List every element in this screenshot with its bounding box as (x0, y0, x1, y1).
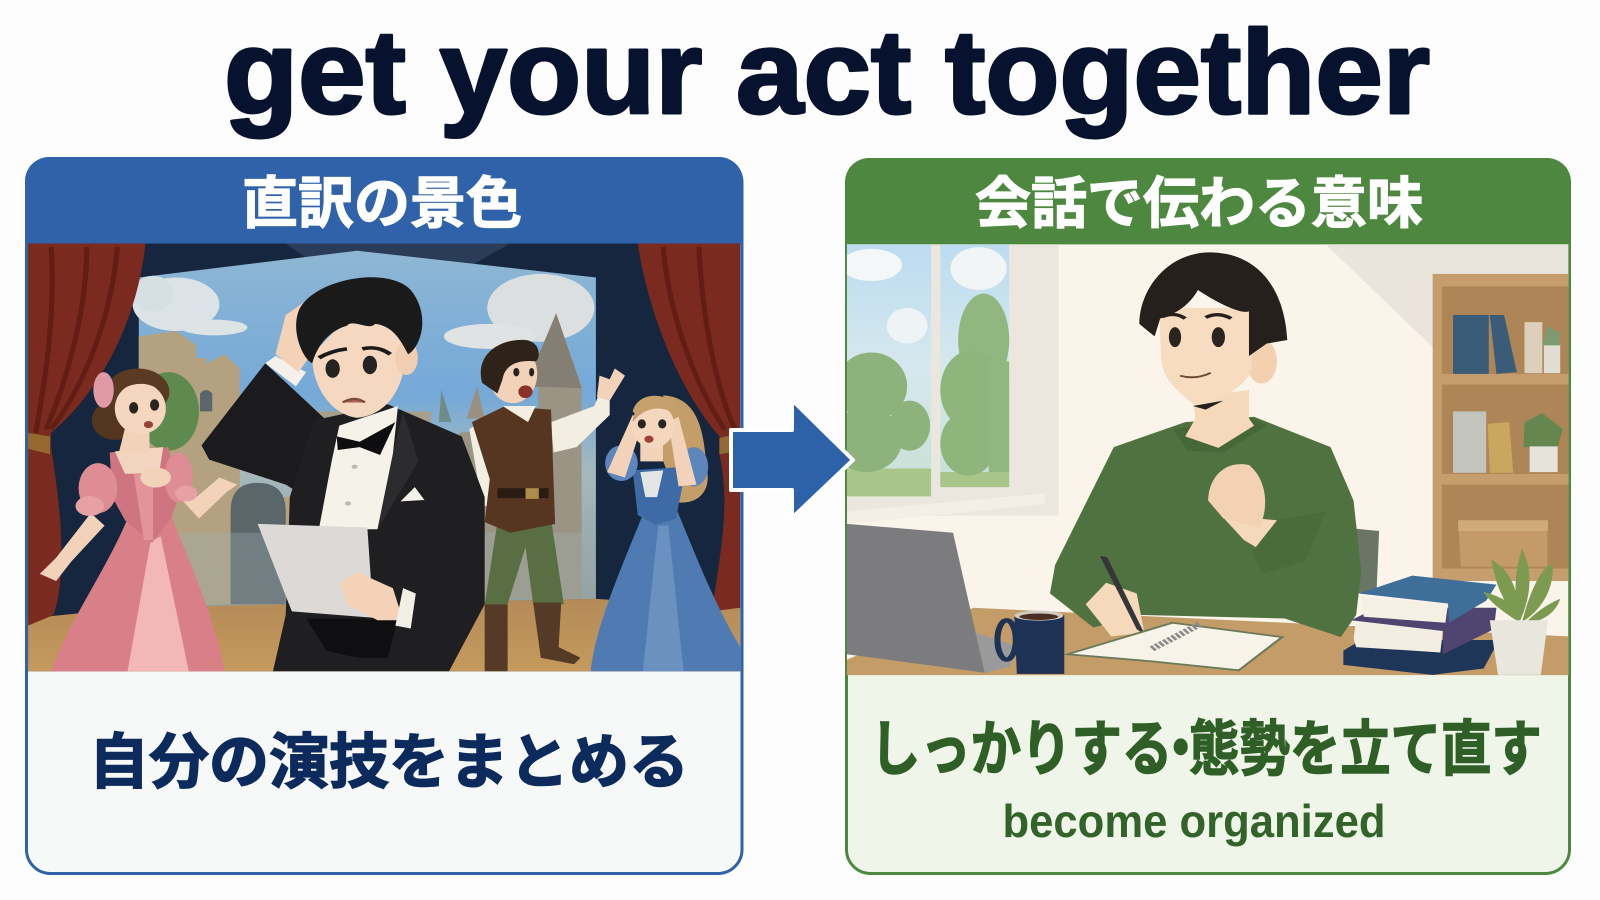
laptop (847, 524, 1019, 673)
arrow: literal to meaning (731, 400, 853, 518)
actress in blue dress (591, 395, 740, 671)
bookshelf (1433, 274, 1568, 581)
actress in pink dress (40, 369, 237, 671)
answer area text: meaning in Japanese: しっかりする・態勢を立て直す (870, 716, 1542, 783)
desk (847, 608, 1568, 675)
backdrop (133, 251, 596, 608)
window (831, 244, 1059, 524)
stack of books (1343, 576, 1499, 675)
man in green sweater (1050, 252, 1361, 637)
illustration: young man organizing himself at desk (831, 244, 1568, 675)
header bar: meaning (845, 158, 1571, 245)
lead actor in tuxedo holding script (202, 277, 485, 671)
answer area text: literal meaning: 自分の演技をまとめる (89, 729, 689, 796)
stage floor (28, 599, 740, 671)
heading: meaning in conversation: 会話で伝わる意味 (975, 172, 1423, 235)
answer area text: English gloss: become organized (1002, 795, 1386, 847)
header bar: literal (25, 157, 743, 244)
coffee mug (997, 611, 1064, 674)
chair (1354, 529, 1379, 594)
illustration: actor forgetting lines on stage (28, 244, 740, 671)
heading: literal scene: 直訳の景色 (242, 172, 522, 235)
potted plant (1483, 549, 1560, 675)
actor in waistcoat (469, 340, 625, 671)
panel: conversational meaning (831, 158, 1571, 874)
panel: literal scene (25, 157, 743, 874)
curtain: left (28, 244, 145, 626)
panel body: meaning (846, 160, 1570, 874)
title: get your act together (224, 6, 1430, 139)
panel body: literal (26, 158, 742, 874)
curtain: right (638, 244, 740, 611)
open notebook (1068, 623, 1282, 670)
